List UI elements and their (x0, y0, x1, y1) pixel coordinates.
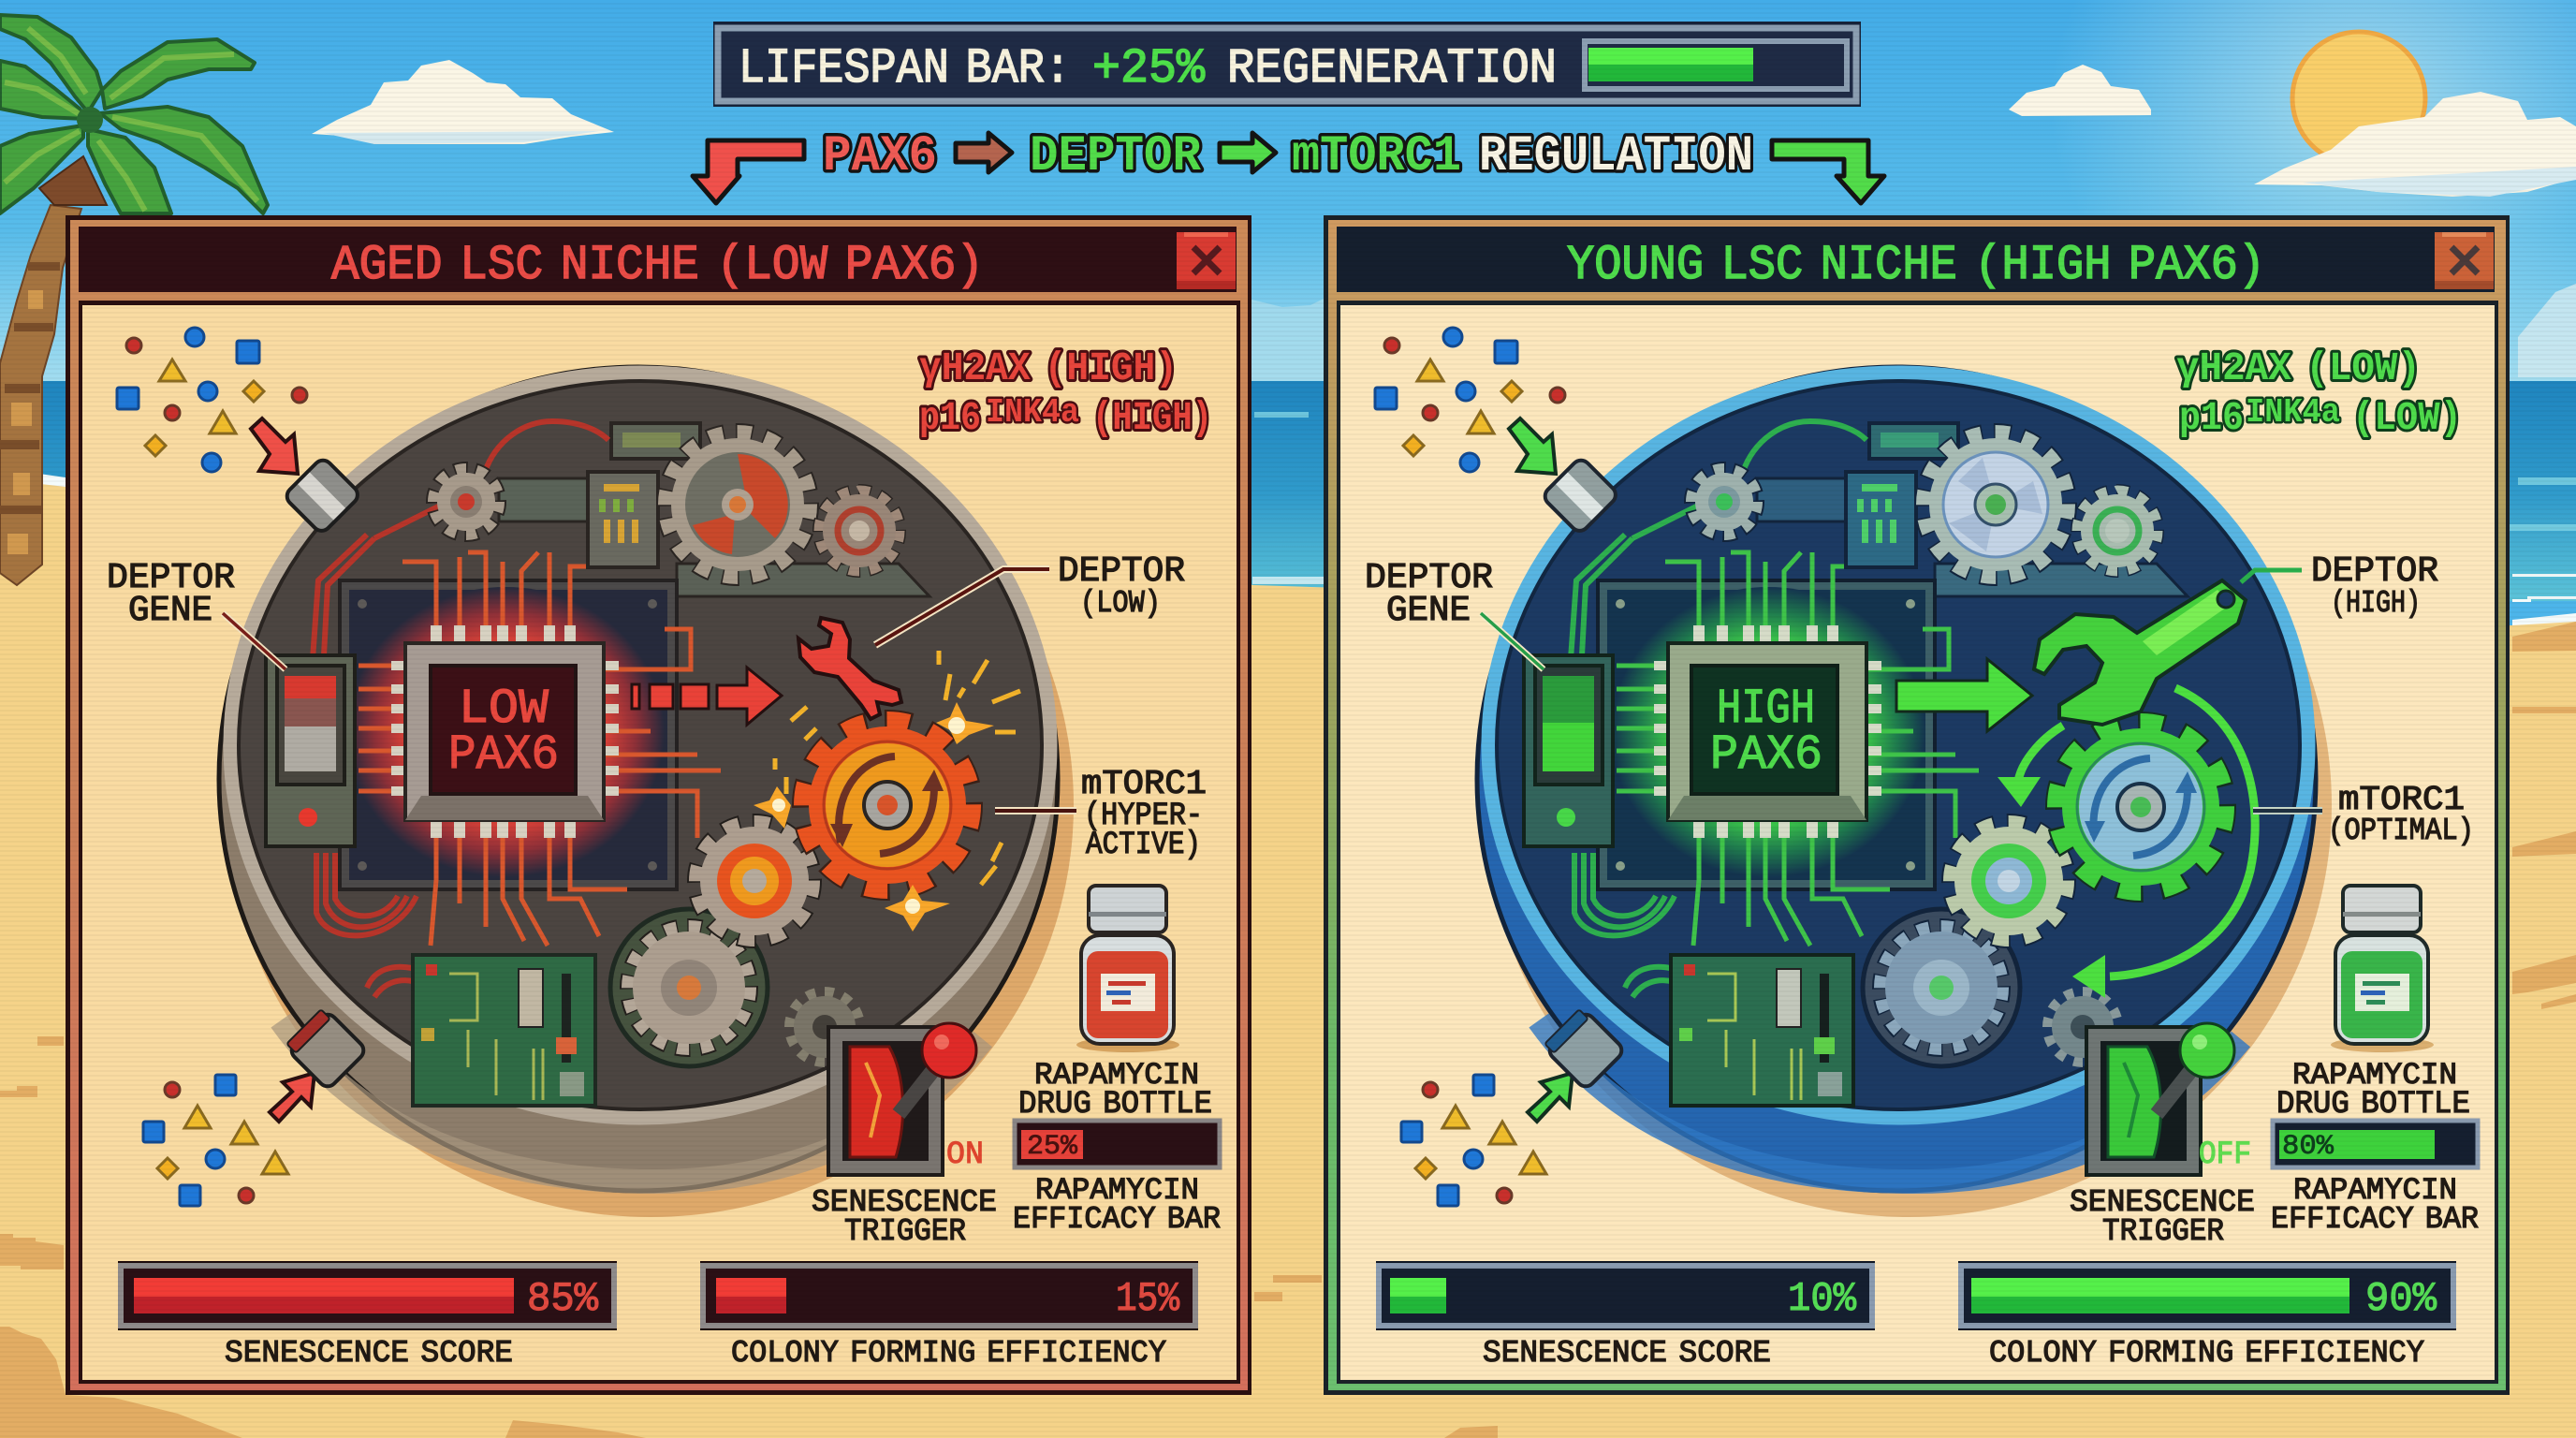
molecules upper (117, 328, 307, 472)
label: mTORC1 hyperactive: ACTIVE) (1086, 828, 1201, 863)
rapamycin efficacy bar (1015, 1121, 1220, 1167)
biomarker text: (LOW) (2352, 395, 2462, 441)
label: senescence trigger: TRIGGER (844, 1214, 966, 1249)
green PCB (1671, 955, 1853, 1106)
small control board (588, 472, 658, 567)
circular rotation arrows (1998, 688, 2255, 998)
DEPTOR gene switch (1524, 655, 1613, 846)
biomarker text: γH2AX (HIGH) (919, 345, 1178, 391)
label: senescence score: SENESCENCE SCORE (1483, 1336, 1771, 1371)
panel: young LSC niche (1324, 215, 2510, 1395)
PAX6 chip (391, 625, 619, 838)
biomarker text: INK4a (2246, 393, 2340, 432)
sand (0, 479, 2576, 1438)
port lower (1542, 1006, 1625, 1090)
rapamycin bottle (2331, 886, 2434, 1052)
label: senescence trigger: SENESCENCE (2070, 1185, 2255, 1220)
label: DEPTOR high: DEPTOR (2311, 551, 2438, 592)
gear plate (1757, 423, 2188, 596)
lifespan bar heading text: LIFESPAN BAR: (739, 41, 1071, 96)
cables (1571, 421, 1866, 997)
senescence score bar: 10% (1788, 1276, 1857, 1323)
close button (1177, 232, 1236, 289)
biomarker text (2176, 345, 2462, 441)
label: senescence trigger: TRIGGER (2102, 1214, 2224, 1249)
molecules lower (1401, 1075, 1546, 1206)
label: rapamycin efficacy bar (2271, 1173, 2479, 1237)
molecules upper (1375, 328, 1565, 472)
lifespan bar header (713, 22, 1861, 107)
label: mTORC1 hyperactive: (HYPER- (1084, 799, 1203, 834)
traces (1617, 552, 1979, 946)
senescence score bar: 85% (527, 1276, 599, 1323)
biomarker text: INK4a (986, 393, 1079, 432)
arrow: red down-left (693, 140, 804, 203)
arrow: out of port lower (1528, 1073, 1573, 1122)
PAX6 chip (1654, 625, 1881, 838)
PAX6 chip: HIGH (1717, 682, 1815, 737)
circuit board with glow (340, 580, 677, 889)
label: DEPTOR GENE (1365, 558, 1544, 669)
label: rapamycin drug bottle: DRUG BOTTLE (1018, 1087, 1212, 1123)
mTORC1 gear optimal (2060, 726, 2221, 888)
label: DEPTOR low: (LOW) (1080, 586, 1161, 621)
trigger state: OFF (2199, 1137, 2251, 1173)
colony forming efficiency bar (700, 1261, 1198, 1330)
sea (0, 381, 2576, 601)
rapamycin efficacy bar: 25% (1027, 1131, 1078, 1163)
senescence trigger lever (2086, 1023, 2234, 1175)
label: colony forming efficiency: COLONY FORMING EFFICIENCY (731, 1336, 1166, 1371)
arrow: strong high signal (1896, 659, 2032, 731)
molecules lower (143, 1075, 288, 1206)
label: DEPTOR GENE (107, 558, 285, 669)
label: rapamycin drug bottle: RAPAMYCIN (1034, 1058, 1199, 1093)
close button (2435, 232, 2494, 289)
label: rapamycin efficacy bar: EFFICACY BAR (2271, 1202, 2479, 1237)
biomarker text: p16 (919, 395, 981, 441)
top gear small right (2079, 492, 2156, 569)
PAX6 chip: PAX6 (1710, 727, 1822, 783)
label: senescence trigger (2070, 1185, 2255, 1249)
label: senescence score: SENESCENCE SCORE (225, 1336, 513, 1371)
gear plate (499, 423, 929, 596)
panel: aged LSC niche (66, 215, 1251, 1395)
label: rapamycin drug bottle: RAPAMYCIN (2292, 1058, 2457, 1093)
palm tree (0, 15, 268, 585)
arrow: out of port lower (270, 1073, 315, 1122)
traces (359, 552, 721, 946)
PAX6 chip: PAX6 (448, 727, 559, 783)
label: mTORC1 optimal (2253, 781, 2474, 848)
rapamycin efficacy bar (2273, 1121, 2478, 1167)
colony forming efficiency bar: 15% (1116, 1276, 1180, 1323)
window frame (1324, 215, 2510, 1395)
wrench: DEPTOR low (798, 618, 901, 719)
top gear large (1927, 436, 2064, 573)
rapamycin efficacy bar: 80% (2282, 1131, 2334, 1163)
label: rapamycin efficacy bar: RAPAMYCIN (1035, 1173, 1199, 1208)
panel title: YOUNG LSC NICHE (HIGH PAX6) (1567, 238, 2265, 293)
label: DEPTOR high: (HIGH) (2331, 586, 2421, 621)
port lower (284, 1006, 367, 1090)
label: rapamycin efficacy bar (1013, 1173, 1221, 1237)
window frame (66, 215, 1251, 1395)
senescence score bar (1376, 1261, 1875, 1330)
label: rapamycin drug bottle: DRUG BOTTLE (2276, 1087, 2470, 1123)
niche dish (1477, 367, 2332, 1217)
port upper (284, 457, 361, 535)
label: DEPTOR low: DEPTOR (1058, 551, 1185, 592)
biomarker text: γH2AX (LOW) (2176, 345, 2421, 391)
arrow: dashed low signal (632, 668, 782, 725)
colony forming efficiency bar (1958, 1261, 2456, 1330)
cables (313, 421, 608, 997)
label: rapamycin drug bottle (1018, 1058, 1212, 1123)
top gear damaged (821, 492, 898, 569)
lower gear small (791, 993, 858, 1061)
lifespan progress bar (1585, 41, 1847, 89)
panel title: AGED LSC NICHE (LOW PAX6) (331, 238, 984, 293)
top gear large (669, 436, 806, 573)
wrench: DEPTOR high (2034, 580, 2246, 725)
rapamycin bottle (1076, 886, 1179, 1052)
label: DEPTOR GENE: GENE (1386, 591, 1471, 631)
small control board (1846, 472, 1916, 567)
lower gear large (610, 909, 768, 1066)
pathway text: DEPTOR: DEPTOR (1030, 128, 1202, 185)
PAX6 chip: LOW (459, 682, 549, 737)
lower gear large (1863, 909, 2020, 1066)
niche dish (219, 367, 1074, 1217)
lifespan bar heading text: +25% (1092, 41, 1206, 96)
port upper (1542, 457, 1619, 535)
mTORC1 gear hyperactive (807, 725, 968, 886)
label: DEPTOR high (2241, 551, 2438, 621)
biomarker text: p16 (2179, 395, 2244, 441)
arrow: green down-right (1772, 140, 1884, 203)
top gear small left (1693, 471, 1755, 533)
trigger state: ON (946, 1137, 984, 1173)
senescence trigger lever (828, 1023, 976, 1175)
label: rapamycin efficacy bar: RAPAMYCIN (2293, 1173, 2457, 1208)
label: DEPTOR GENE: DEPTOR (107, 558, 235, 598)
label: DEPTOR GENE: DEPTOR (1365, 558, 1493, 598)
lower gear small (2049, 993, 2116, 1061)
pathway text: REGULATION: REGULATION (1479, 128, 1753, 185)
label: mTORC1 hyperactive: mTORC1 (1081, 765, 1207, 803)
sparks (754, 651, 1020, 932)
arrow: PAX6 to DEPTOR (956, 133, 1012, 172)
arrow: molecules into port upper (1509, 418, 1556, 474)
lifespan bar heading text (739, 41, 1557, 96)
senescence score bar (118, 1261, 617, 1330)
label: DEPTOR low (875, 551, 1185, 645)
green PCB (413, 955, 595, 1106)
label: DEPTOR GENE: GENE (128, 591, 212, 631)
biomarker text: (HIGH) (1092, 395, 1212, 441)
circuit board with glow (1598, 580, 1935, 889)
medium gear (1953, 825, 2065, 937)
DEPTOR gene switch (266, 655, 355, 846)
pathway text: mTORC1: mTORC1 (1292, 128, 1461, 185)
label: rapamycin efficacy bar: EFFICACY BAR (1013, 1202, 1221, 1237)
label: senescence trigger (812, 1185, 997, 1249)
label: mTORC1 hyperactive (995, 765, 1207, 863)
arrow: DEPTOR to mTORC1 (1220, 133, 1276, 172)
pathway text: PAX6: PAX6 (823, 128, 937, 185)
label: colony forming efficiency: COLONY FORMING EFFICIENCY (1989, 1336, 2424, 1371)
pathway regulation row (693, 128, 1884, 203)
label: mTORC1 optimal: mTORC1 (2338, 781, 2465, 819)
medium gear (698, 825, 811, 937)
label: mTORC1 optimal: (OPTIMAL) (2328, 814, 2474, 848)
clouds (312, 60, 614, 144)
arrow: molecules into port upper (251, 418, 298, 474)
colony forming efficiency bar: 90% (2365, 1276, 2437, 1323)
biomarker text (919, 345, 1212, 441)
label: rapamycin drug bottle (2276, 1058, 2470, 1123)
label: senescence trigger: SENESCENCE (812, 1185, 997, 1220)
lifespan bar heading text: REGENERATION (1227, 41, 1557, 96)
top gear small left (435, 471, 497, 533)
sun (2292, 32, 2425, 165)
